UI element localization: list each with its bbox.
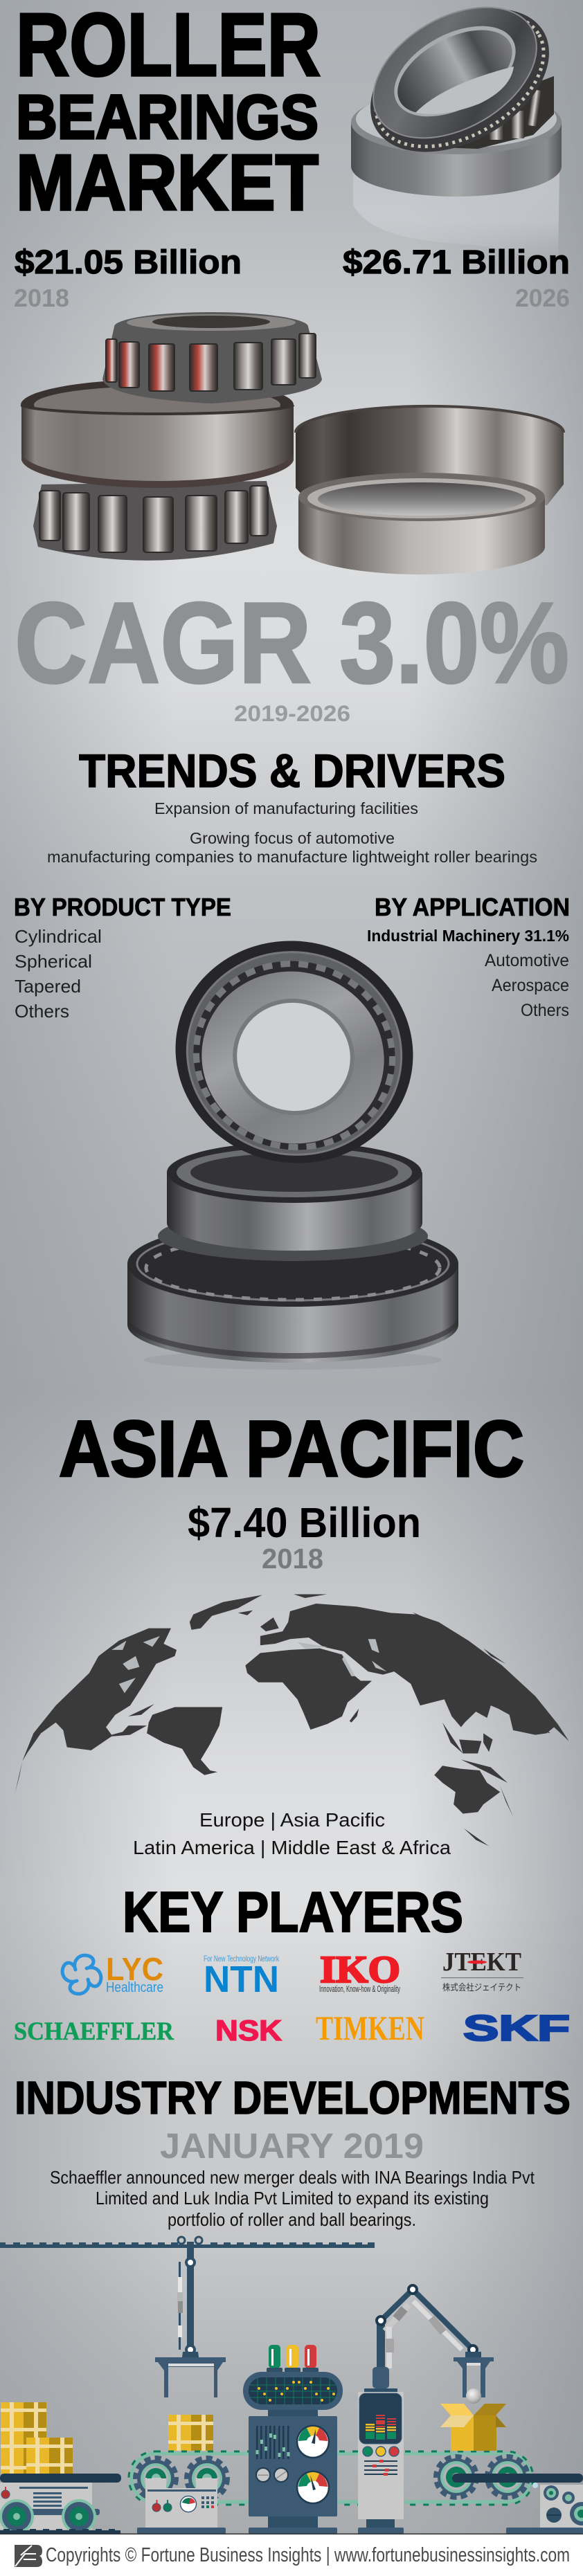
- panel: by product type: Cylindrical: [15, 926, 102, 947]
- panel: by application: BY APPLICATION: [375, 893, 570, 921]
- text: regions list: Europe | Asia Pacific: [199, 1809, 385, 1831]
- image: stacked tapered bearings: [21, 312, 564, 574]
- icon: Fortune Business Insights logo: [15, 2545, 42, 2567]
- logo: SKF: SKF: [463, 2008, 570, 2049]
- logo: JTEKT: JTEKT: [442, 1948, 521, 1977]
- logo: IKO: IKO: [320, 1948, 400, 1990]
- title: MARKET: [16, 139, 319, 227]
- stacked cargo boxes: [1, 2402, 213, 2474]
- logo: IKO: Innovation, Know-how & Originality: [319, 1984, 400, 1994]
- regional value: [188, 1499, 421, 1575]
- text: drivers list: [47, 799, 537, 866]
- logo: Timken: TIMKEN: [316, 2008, 424, 2047]
- logo: LYC Healthcare: [62, 1951, 163, 1995]
- regional value: 2018: [262, 1543, 323, 1575]
- market value 2018: $21.05 Billion: [15, 244, 242, 281]
- CAGR figure: 2019-2026: [234, 701, 350, 726]
- market value 2026: 2026: [515, 284, 570, 312]
- logo: Schaeffler: SCHAEFFLER: [14, 2017, 174, 2046]
- logo: JTEKT: 株式会社ジェイテクト: [442, 1982, 521, 1993]
- market value 2026: $26.71 Billion: [343, 244, 570, 281]
- text: drivers list: Expansion of manufacturing facilities: [154, 799, 418, 817]
- panel: by application: Automotive: [485, 951, 569, 970]
- heading: key players: KEY PLAYERS: [123, 1880, 463, 1944]
- world map: [15, 1595, 569, 1846]
- panel: by product type: Spherical: [15, 951, 92, 972]
- panel: by application: Aerospace: [492, 976, 569, 995]
- regional value: $7.40 Billion: [188, 1499, 421, 1546]
- heading: trends and drivers: TRENDS & DRIVERS: [79, 745, 505, 797]
- text: regions list: [133, 1809, 451, 1858]
- panel: by product type: Tapered: [15, 976, 81, 997]
- text: development description: portfolio of roller and ball bearings.: [168, 2209, 416, 2230]
- market value 2018: [14, 244, 242, 312]
- text: drivers list: manufacturing companies to manufacture lightweight roller bearings: [47, 848, 537, 866]
- panel: by product type: [14, 893, 231, 1022]
- robot arm and control tower: [358, 2285, 494, 2534]
- text: development description: Schaeffler announced new merger deals with INA Bearings India Pvt: [50, 2167, 535, 2188]
- panel: by application: [367, 893, 570, 1020]
- image: tilted bearing on ring: [346, 0, 574, 262]
- text: drivers list: Growing focus of automotive: [190, 829, 395, 847]
- image: central bearing stack: [127, 919, 458, 1370]
- text: development description: [50, 2167, 535, 2230]
- title: [16, 0, 321, 227]
- logo: JTEKT: [441, 1948, 523, 1993]
- market value 2026: [343, 244, 570, 312]
- panel: by product type: Others: [15, 1001, 69, 1022]
- panel: by application: Industrial Machinery 31.1%: [367, 927, 569, 945]
- logo: NTN: For New Technology Network: [204, 1954, 280, 1963]
- logo: NTN: NTN: [204, 1959, 279, 2000]
- text: development description: Limited and Luk India Pvt Limited to expand its existing: [96, 2188, 489, 2208]
- illustration: factory line: [0, 2237, 583, 2534]
- overhead rail: [0, 2237, 375, 2248]
- hanging gripper arm: [155, 2242, 226, 2397]
- logo: LYC Healthcare: LYC: [106, 1951, 163, 1987]
- panel: by application: Others: [521, 1001, 569, 1020]
- date: JANUARY 2019: [160, 2126, 424, 2166]
- market value 2018: 2018: [14, 284, 69, 312]
- logo: NSK: NSK: [215, 2014, 282, 2047]
- panel: by product type: BY PRODUCT TYPE: [14, 893, 231, 921]
- conveyor belt and gears: [129, 2451, 533, 2505]
- central gauge machine: [243, 2345, 343, 2534]
- open cardboard box: [440, 2404, 506, 2451]
- small control box: [137, 2469, 226, 2534]
- text: regions list: Latin America | Middle East & Africa: [133, 1837, 451, 1858]
- left cart: [0, 2474, 121, 2534]
- title: BEARINGS: [16, 83, 319, 152]
- heading: Asia Pacific: ASIA PACIFIC: [59, 1405, 524, 1494]
- right conveyor bar and gear box: [452, 2474, 583, 2534]
- logo: LYC Healthcare: Healthcare: [106, 1980, 163, 1995]
- footer: [0, 2533, 583, 2576]
